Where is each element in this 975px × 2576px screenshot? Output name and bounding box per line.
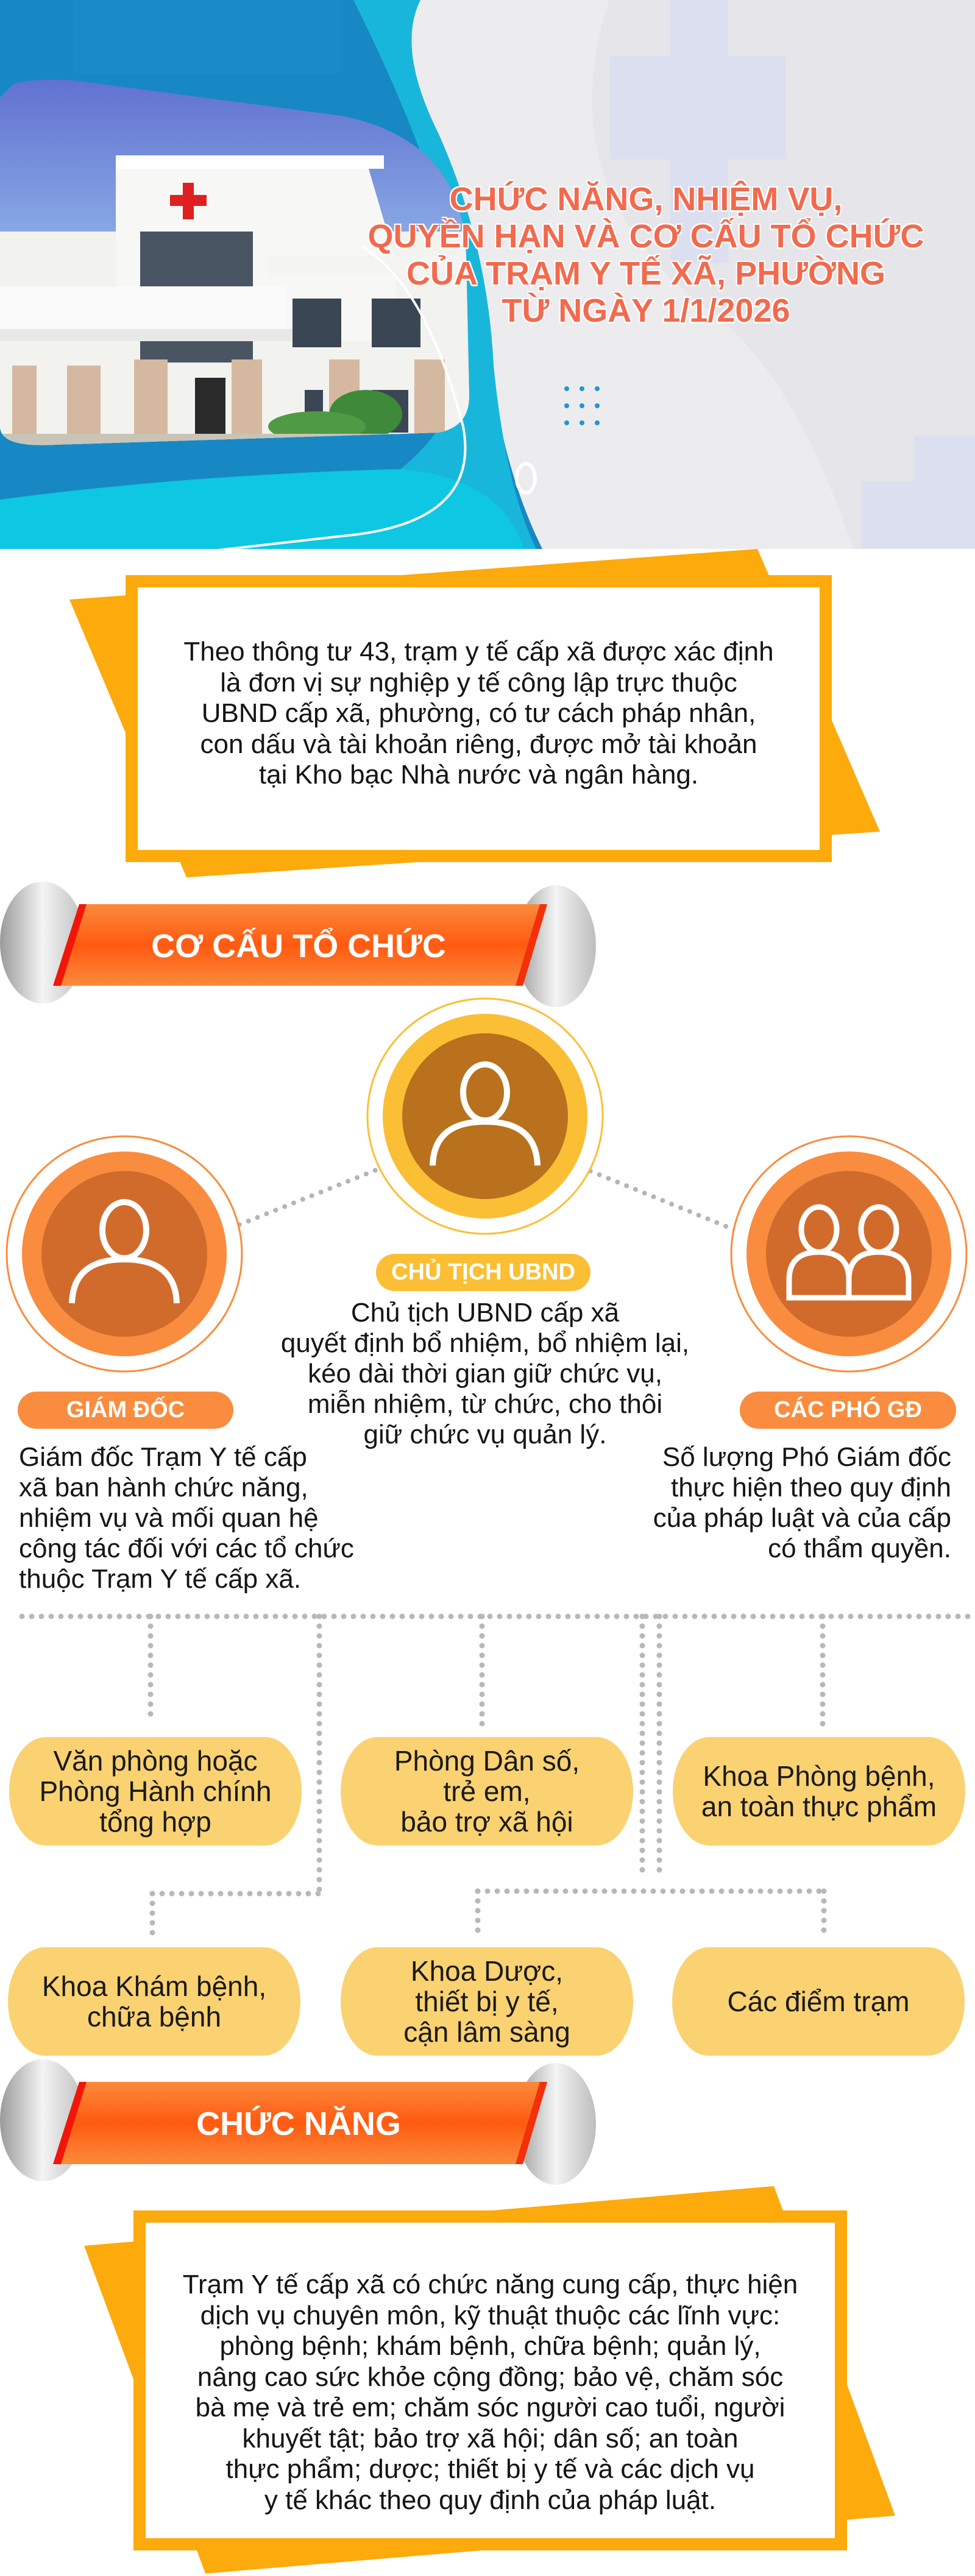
text: giám đốc: xã ban hành chức năng, [19,1473,308,1502]
title [368,179,924,329]
label: chủ tịch UBND [376,1254,590,1291]
dots [564,386,600,425]
connector dots between circles [239,1167,734,1231]
text: phó GĐ: Số lượng Phó Giám đốc [662,1442,951,1472]
function box: nâng cao sức khỏe cộng đồng; bảo vệ, chăm sóc [197,2362,783,2392]
text: phó GĐ: có thẩm quyền. [768,1534,951,1563]
title: QUYỀN HẠN VÀ CƠ CẤU TỔ CHỨC [368,218,924,255]
text: giám đốc: thuộc Trạm Y tế cấp xã. [19,1564,301,1594]
intro box: tại Kho bạc Nhà nước và ngân hàng. [259,760,698,790]
label: các phó GĐ [740,1392,956,1429]
crosses [609,0,786,263]
text: chủ tịch: quyết định bổ nhiệm, bổ nhiệm lại, [281,1328,689,1358]
box: phòng dân số: bảo trợ xã hội [400,1806,573,1838]
header banner [0,0,975,549]
intro box: là đơn vị sự nghiệp y tế công lập trực thuộc [220,668,737,697]
text: phó GĐ: của pháp luật và của cấp [653,1503,951,1533]
text: giám đốc: nhiệm vụ và mối quan hệ [19,1503,319,1533]
function box: khuyết tật; bảo trợ xã hội; dân số; an toàn [242,2424,739,2453]
box: văn phòng: Phòng Hành chính [39,1775,272,1807]
text: giám đốc: Giám đốc Trạm Y tế cấp [19,1442,307,1472]
text: chủ tịch [281,1298,689,1449]
box: điểm trạm [672,1947,965,2056]
icon: giám đốc circle [6,1136,243,1372]
box: khoa dược: Khoa Dược, [411,1955,563,1987]
box: khoa dược: thiết bị y tế, [415,1986,559,2017]
box: văn phòng: tổng hợp [99,1806,211,1838]
text: phó GĐ [653,1442,951,1563]
box: phòng dân số: trẻ em, [443,1775,531,1807]
box: khoa dược: cận lâm sàng [403,2016,570,2048]
text: giám đốc [19,1442,354,1594]
text: chủ tịch: kéo dài thời gian giữ chức vụ, [308,1359,662,1389]
box: khoa phòng bệnh: Khoa Phòng bệnh, [703,1760,935,1792]
icon: các phó GĐ circle [730,1136,968,1372]
box: văn phòng: Văn phòng hoặc [53,1745,258,1777]
function box [84,2186,895,2574]
section banner: cơ cấu tổ chức [0,882,596,1007]
text: chủ tịch: giữ chức vụ quản lý. [364,1420,606,1449]
intro box [69,549,880,877]
box: khoa dược [341,1947,633,2056]
box: phòng dân số: Phòng Dân số, [394,1745,580,1777]
label: các phó GĐ: CÁC PHÓ GĐ [774,1397,922,1423]
intro box: Theo thông tư 43, trạm y tế cấp xã được xác định [183,637,774,667]
title: CỦA TRẠM Y TẾ XÃ, PHƯỜNG [406,255,885,292]
org connectors [20,1613,970,1935]
intro box: con dấu và tài khoản riêng, được mở tài khoản [200,729,757,759]
banner title: CƠ CẤU TỔ CHỨC [151,928,446,964]
box: điểm trạm: Các điểm trạm [727,1986,910,2017]
building photo [0,73,475,452]
icon: chủ tịch circle [367,998,603,1234]
label: chủ tịch UBND: CHỦ TỊCH UBND [391,1259,575,1285]
label: giám đốc [18,1392,233,1429]
box: khoa khám bệnh [8,1947,300,2056]
box: khoa phòng bệnh [673,1737,965,1845]
text: phó GĐ: thực hiện theo quy định [671,1473,951,1502]
intro box: UBND cấp xã, phường, có tư cách pháp nhân, [202,698,756,728]
box: khoa phòng bệnh: an toàn thực phẩm [701,1791,937,1822]
text: chủ tịch: Chủ tịch UBND cấp xã [351,1298,619,1328]
text: giám đốc: công tác đối với các tổ chức [19,1534,354,1563]
section banner: chức năng [0,2059,596,2185]
box: văn phòng [9,1737,302,1845]
function box: y tế khác theo quy định của pháp luật. [264,2485,716,2515]
function box: Trạm Y tế cấp xã có chức năng cung cấp, thực hiện [183,2270,798,2299]
function box: dịch vụ chuyên môn, kỹ thuật thuộc các lĩnh vực: [200,2301,780,2330]
text: chủ tịch: miễn nhiệm, từ chức, cho thôi [308,1389,662,1419]
banner title: CHỨC NĂNG [196,2106,401,2142]
box: khoa khám bệnh: Khoa Khám bệnh, [42,1970,266,2002]
function box: bà mẹ và trẻ em; chăm sóc người cao tuổi, người [196,2393,785,2422]
box: khoa khám bệnh: chữa bệnh [87,2001,221,2033]
label: giám đốc: GIÁM ĐỐC [66,1397,185,1423]
title: CHỨC NĂNG, NHIỆM VỤ, [450,181,842,218]
title: TỪ NGÀY 1/1/2026 [502,292,790,329]
function box: phòng bệnh; khám bệnh, chữa bệnh; quản lý, [219,2331,761,2361]
box: phòng dân số [341,1737,633,1845]
function box: thực phẩm; dược; thiết bị y tế và các dịch vụ [226,2454,754,2484]
